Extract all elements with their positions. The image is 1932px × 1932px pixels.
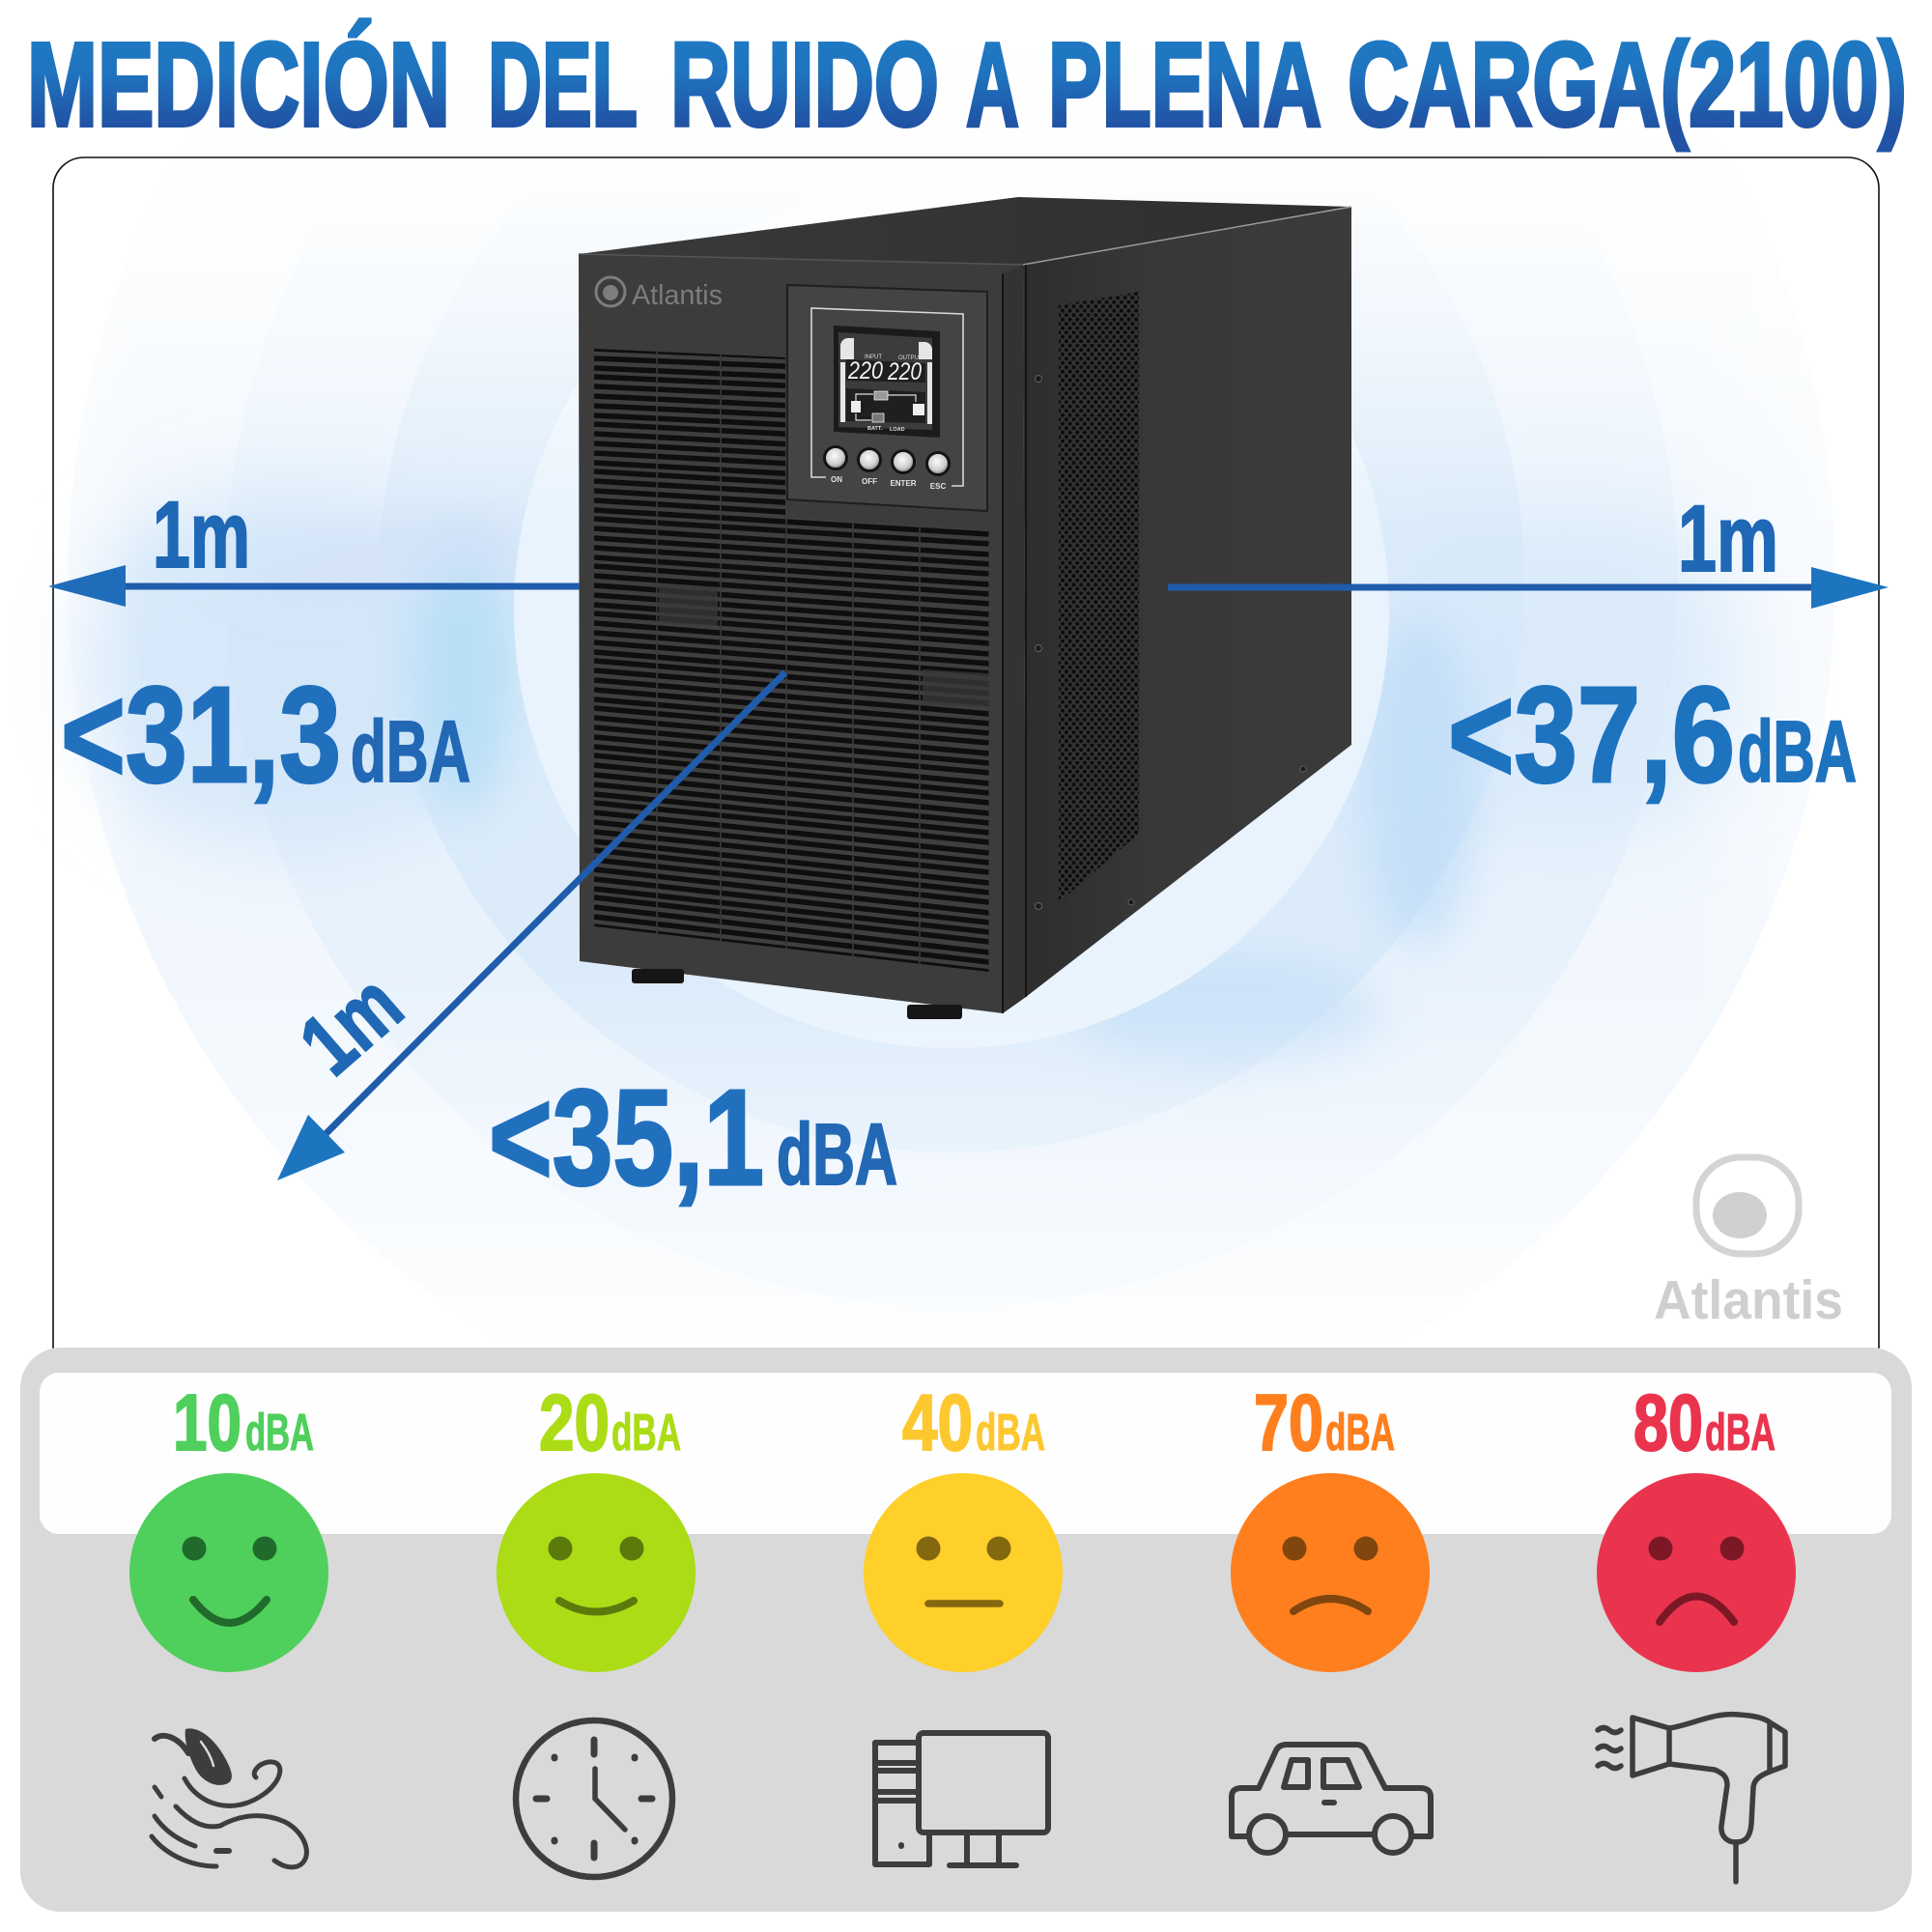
- 70 dBA column: [1231, 1378, 1431, 1853]
- 40 dBA label: 40: [902, 1378, 973, 1467]
- UPS front face: [579, 254, 1026, 1013]
- LCD display: BATT.: [867, 426, 883, 432]
- 10 dBA label: [173, 1378, 314, 1467]
- LCD display: 220: [887, 358, 922, 385]
- left 1m arrow: [48, 565, 580, 607]
- UPS feet: [632, 969, 962, 1019]
- background sound ripples: [61, 247, 1812, 1262]
- front 1m arrow: [277, 672, 785, 1180]
- right 1m arrow: [1168, 567, 1889, 609]
- 20 dBA label: [539, 1378, 681, 1467]
- LCD display: INPUT: [865, 355, 882, 360]
- button labels: ON: [831, 475, 842, 484]
- main panel outline: [53, 157, 1879, 1352]
- 10 dBA label: dBA: [245, 1404, 314, 1462]
- button labels: OFF: [862, 477, 877, 486]
- very sad face: [1597, 1473, 1796, 1672]
- front vent grille: [589, 343, 995, 980]
- 10 dBA label: 10: [173, 1378, 242, 1467]
- button labels: ESC: [930, 482, 946, 491]
- 10 dBA column: [129, 1378, 328, 1867]
- noise scale panel: [20, 1348, 1912, 1912]
- UPS top face: [579, 197, 1351, 265]
- left noise value: dBA: [351, 704, 470, 801]
- button labels: ENTER: [890, 479, 917, 488]
- title: MEDICIÓN: [27, 19, 450, 152]
- LCD display: LOAD: [890, 427, 905, 433]
- front noise value: dBA: [777, 1107, 897, 1204]
- watermark logo: [1654, 1157, 1843, 1331]
- left noise value: <31,3: [61, 658, 341, 810]
- UPS brand logo: [596, 277, 723, 311]
- front noise value: <35,1: [489, 1061, 764, 1213]
- title: RUIDO: [670, 19, 939, 152]
- LCD display: OUTPUT: [898, 355, 923, 361]
- 40 dBA column: [864, 1378, 1063, 1865]
- icon: hair dryer: [1598, 1715, 1785, 1882]
- title: A: [966, 19, 1019, 152]
- 80 dBA label: 80: [1634, 1378, 1703, 1467]
- 80 dBA label: dBA: [1705, 1404, 1776, 1462]
- side screws: [1036, 375, 1306, 910]
- icon: desktop computer: [875, 1733, 1048, 1865]
- 40 dBA label: [902, 1378, 1045, 1467]
- white header band: [40, 1373, 1891, 1534]
- 20 dBA label: dBA: [611, 1404, 681, 1462]
- 80 dBA column: [1597, 1378, 1796, 1882]
- 70 dBA label: 70: [1254, 1378, 1323, 1467]
- title: [27, 19, 1907, 152]
- 20 dBA label: 20: [539, 1378, 610, 1467]
- UPS brand logo: Atlantis: [632, 280, 723, 311]
- front distance label: 1m: [283, 956, 420, 1094]
- title: DEL: [488, 19, 638, 152]
- right noise value: dBA: [1738, 704, 1857, 801]
- 70 dBA label: [1254, 1378, 1395, 1467]
- UPS product: [579, 197, 1351, 1019]
- LCD display: 220: [847, 357, 883, 384]
- side perforated vent: [1059, 292, 1139, 902]
- neutral face: [864, 1473, 1063, 1672]
- icon: car: [1232, 1745, 1431, 1853]
- 70 dBA label: dBA: [1325, 1404, 1395, 1462]
- 20 dBA column: [497, 1378, 696, 1877]
- slightly smiling face: [497, 1473, 696, 1672]
- title: PLENA: [1048, 19, 1321, 152]
- 40 dBA label: dBA: [976, 1404, 1045, 1462]
- LCD display: [834, 326, 940, 438]
- icon: mouse in the wind: [152, 1728, 306, 1867]
- right distance label: 1m: [1678, 486, 1778, 591]
- button labels: [831, 475, 946, 491]
- icon: clock: [516, 1720, 672, 1877]
- watermark logo: Atlantis: [1654, 1269, 1843, 1331]
- UPS side face: [1023, 207, 1351, 997]
- control buttons: [825, 446, 949, 475]
- smiling face: [129, 1473, 328, 1672]
- sad face: [1231, 1473, 1430, 1672]
- control panel: [787, 285, 987, 511]
- right noise value: <37,6: [1448, 658, 1735, 810]
- 80 dBA label: [1634, 1378, 1776, 1467]
- left distance label: 1m: [153, 482, 250, 587]
